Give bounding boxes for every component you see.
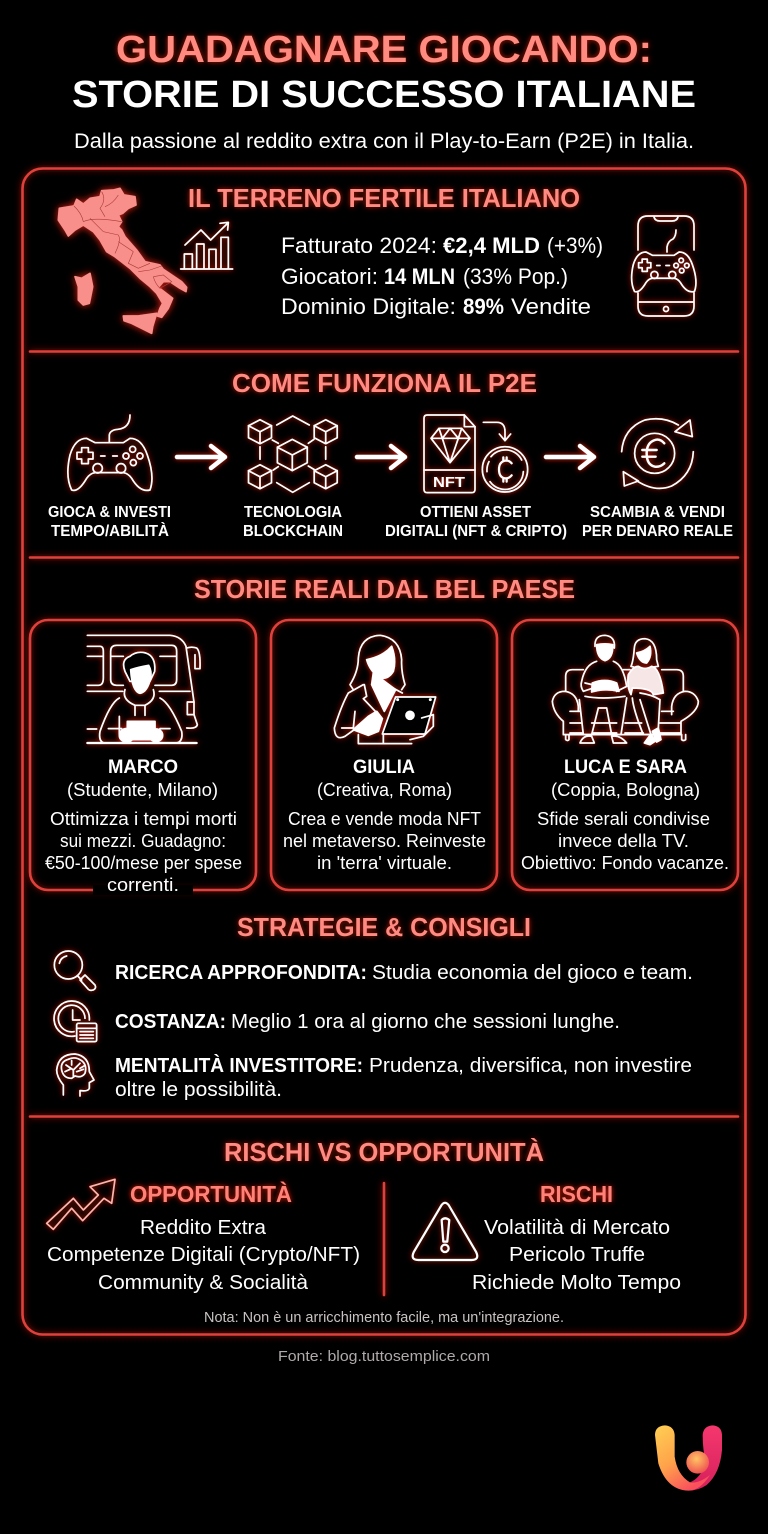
tip text: investor mindset: MENTALITÀ INVESTITORE:: [115, 1054, 363, 1077]
icon: euro exchange: [622, 419, 693, 488]
icon: phone with gamepad: [632, 216, 696, 316]
arrow 1: [177, 446, 225, 468]
tip text: research: [115, 962, 693, 984]
name: Marco: MARCO: [108, 757, 178, 778]
NFT label: NFT: [433, 474, 465, 491]
icon: couple on sofa: [552, 635, 698, 745]
column: rischi: [413, 1181, 681, 1294]
story: Giulia: in 'terra' virtuale.: [317, 853, 452, 873]
step 1 label: GIOCA & INVESTI: [48, 504, 171, 521]
step 4 label: PER DENARO REALE: [582, 523, 733, 540]
step 1: play and invest: [48, 415, 171, 540]
icon: woman with tablet: [334, 635, 436, 744]
card frame: [512, 620, 738, 890]
opportunity list: Reddito Extra: [140, 1217, 267, 1239]
story: Giulia: nel metaverso. Reinveste: [283, 831, 486, 851]
step 2: blockchain: [243, 416, 343, 540]
title block: [72, 29, 696, 153]
column: opportunità: [47, 1179, 360, 1294]
icon: NFT file and crypto coin: [424, 415, 528, 493]
icon: rising arrow: [47, 1179, 115, 1229]
icon: blockchain cubes: [248, 416, 337, 492]
stat: digital sales: [281, 294, 591, 319]
divider: [30, 556, 738, 559]
story: Luca e Sara: invece della TV.: [558, 831, 689, 851]
icon: clock and calendar: [54, 1001, 97, 1042]
heading: terreno fertile: IL TERRENO FERTILE ITALIANO: [188, 183, 580, 213]
panel: rischi vs opportunità: [47, 1137, 681, 1326]
stat: digital sales: Vendite: [511, 294, 591, 319]
story: Marco: Ottimizza i tempi morti: [50, 809, 237, 829]
stat: players: (33% Pop.): [463, 264, 568, 289]
stat: revenue: €2,4 MLD: [443, 233, 540, 258]
tip text: research: RICERCA APPROFONDITA:: [115, 962, 367, 984]
story: Giulia: Crea e vende moda NFT: [288, 809, 481, 829]
stat: players: [281, 264, 568, 289]
risk list: Volatilità di Mercato: [484, 1217, 670, 1239]
step 3 label: [385, 504, 567, 540]
title line 2: STORIE DI SUCCESSO ITALIANE: [72, 74, 696, 116]
story: Luca e Sara: Obiettivo: Fondo vacanze.: [521, 853, 729, 873]
role: Marco: (Studente, Milano): [67, 780, 218, 800]
step 2 label: [243, 504, 343, 540]
story: Giulia: [283, 809, 486, 873]
stat: players: 14 MLN: [384, 264, 455, 289]
tip text: research: Studia economia del gioco e team.: [372, 962, 693, 984]
icon: game controller: [68, 415, 152, 490]
arrow 3: [546, 446, 594, 468]
tip text: investor mindset: [115, 1054, 692, 1101]
icon: map of Italy: [58, 188, 187, 333]
step 1 label: [48, 504, 171, 540]
step 3: digital assets: [385, 415, 567, 540]
tip: research: [54, 951, 693, 990]
step 4 label: [582, 504, 733, 540]
step 1 label: TEMPO/ABILITÀ: [51, 521, 169, 540]
icon: magnifying glass: [54, 951, 96, 990]
market stats: [281, 233, 603, 319]
stat: revenue: (+3%): [547, 233, 603, 258]
icon: student on bus: [87, 635, 200, 743]
tip text: investor mindset: oltre le possibilità.: [115, 1079, 282, 1101]
heading: storie reali: STORIE REALI DAL BEL PAESE: [194, 574, 575, 604]
icon: head with brain: [57, 1054, 94, 1096]
panel: come funziona il P2E: [48, 368, 733, 540]
stat: digital sales: Dominio Digitale:: [281, 294, 456, 319]
subheading: opportunità: OPPORTUNITÀ: [130, 1180, 292, 1207]
main panel frame: [22, 168, 746, 1334]
stat: players: Giocatori:: [281, 264, 378, 289]
source: Fonte: blog.tuttosemplice.com: [278, 1349, 490, 1365]
step 3 label: DIGITALI (NFT & CRIPTO): [385, 523, 567, 540]
divider: [30, 1115, 738, 1118]
role: Luca e Sara: (Coppia, Bologna): [551, 780, 700, 800]
tip text: consistency: Meglio 1 ora al giorno che sessioni lunghe.: [231, 1011, 620, 1033]
story: Marco: [45, 809, 242, 895]
tip text: investor mindset: Prudenza, diversifica, non investire: [369, 1055, 692, 1077]
story: Marco: correnti.: [107, 875, 179, 895]
risk list: [472, 1217, 681, 1294]
card frame: [30, 620, 256, 890]
title line 1: GUADAGNARE GIOCANDO:: [116, 29, 652, 71]
step 4 label: SCAMBIA & VENDI: [590, 504, 725, 521]
card frame: [271, 620, 497, 890]
card: Luca e Sara: [512, 620, 738, 890]
icon: growth chart: [181, 222, 233, 269]
role: Giulia: (Creativa, Roma): [317, 780, 452, 800]
divider: [30, 350, 738, 353]
name: Giulia: GIULIA: [353, 757, 415, 778]
card: Giulia: [271, 620, 497, 890]
panel: strategie e consigli: [54, 912, 693, 1101]
note: Nota: Non è un arricchimento facile, ma un'integrazione.: [204, 1310, 564, 1326]
story: Marco: €50-100/mese per spese: [45, 853, 242, 873]
subheading: rischi: RISCHI: [540, 1181, 613, 1207]
opportunity list: Community & Socialità: [98, 1272, 309, 1294]
stat: revenue: [281, 233, 603, 258]
card: Marco: [30, 620, 256, 895]
step 3 label: OTTIENI ASSET: [420, 504, 531, 521]
subtitle: Dalla passione al reddito extra con il Play-to-Earn (P2E) in Italia.: [74, 130, 694, 153]
stat: revenue: Fatturato 2024:: [281, 233, 437, 258]
heading: come funziona: COME FUNZIONA IL P2E: [232, 368, 537, 398]
story: Luca e Sara: Sfide serali condivise: [537, 809, 710, 829]
opportunity list: [47, 1217, 360, 1294]
step 2 label: TECNOLOGIA: [244, 504, 342, 521]
heading: strategie: STRATEGIE & CONSIGLI: [237, 912, 531, 942]
gap in frame under text: [93, 885, 193, 895]
opportunity list: Competenze Digitali (Crypto/NFT): [47, 1244, 360, 1266]
panel: storie reali: [30, 574, 738, 895]
icon: warning triangle: [413, 1203, 477, 1260]
panel: il terreno fertile italiano: [58, 183, 696, 333]
tip text: consistency: COSTANZA:: [115, 1011, 226, 1033]
step 2 label: BLOCKCHAIN: [243, 523, 343, 540]
story: Luca e Sara: [521, 809, 729, 873]
tip: investor mindset: [57, 1054, 692, 1101]
arrow 2: [357, 446, 405, 468]
stat: digital sales: 89%: [463, 294, 504, 319]
heading: rischi vs opportunità: RISCHI VS OPPORTUNITÀ: [224, 1137, 544, 1167]
story: Marco: sui mezzi. Guadagno:: [60, 831, 226, 851]
step 4: trade and sell: [582, 419, 733, 540]
logo: [655, 1425, 722, 1491]
center divider: [383, 1183, 385, 1295]
risk list: Richiede Molto Tempo: [472, 1272, 681, 1294]
name: Luca e Sara: LUCA E SARA: [564, 757, 687, 778]
risk list: Pericolo Truffe: [509, 1244, 645, 1266]
tip: consistency: [54, 1001, 620, 1042]
